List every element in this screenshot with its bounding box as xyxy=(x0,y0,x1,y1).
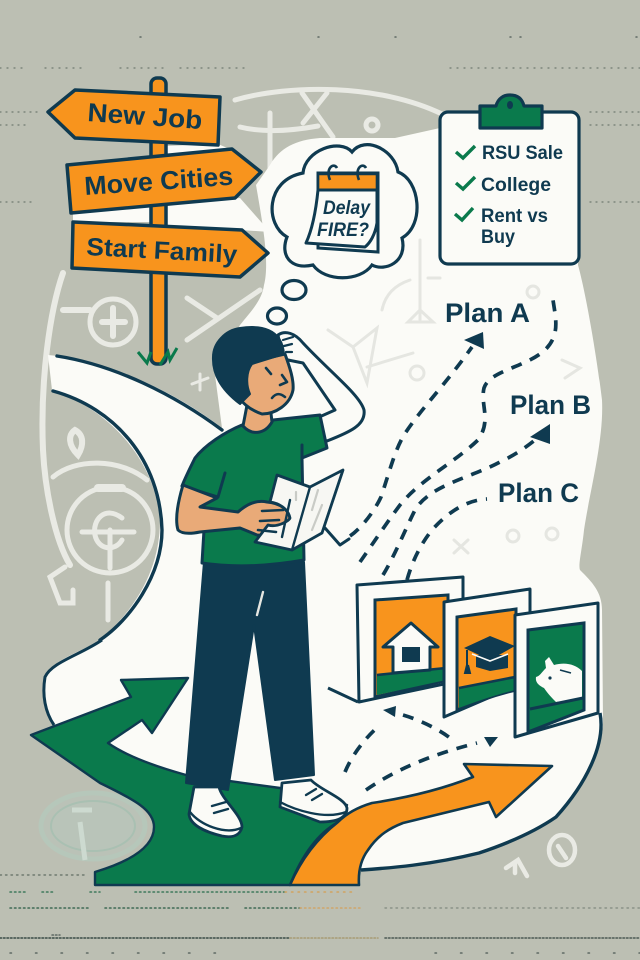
house icon xyxy=(383,623,438,673)
panel: piggy bank xyxy=(515,603,598,737)
thought bubble xyxy=(268,145,417,324)
green arrow road xyxy=(31,678,347,885)
panel: graduation xyxy=(444,589,530,717)
calendar: Delay xyxy=(323,198,371,219)
checklist text: RSU Sale xyxy=(482,142,563,164)
faint sketches on white xyxy=(328,240,580,553)
calendar xyxy=(306,166,378,252)
sign: Move Cities: Move Cities xyxy=(83,161,234,201)
clipboard checklist: Rent vs xyxy=(481,205,548,227)
white background blob xyxy=(44,120,603,880)
right shoe xyxy=(280,780,347,822)
hair xyxy=(213,327,284,404)
clipboard checklist xyxy=(440,95,579,264)
piggy icon xyxy=(536,657,582,702)
road: white left edge xyxy=(44,640,102,725)
face xyxy=(231,354,293,414)
arrowheads xyxy=(383,332,550,747)
grass xyxy=(138,348,177,365)
road: right white edge xyxy=(361,713,601,870)
faint compass stamp xyxy=(41,793,145,860)
sign: Start Family: Start Family xyxy=(86,233,238,269)
dashed plan paths xyxy=(345,300,556,790)
thought dots xyxy=(282,280,306,300)
sign: New Job xyxy=(48,90,220,145)
neck xyxy=(243,400,272,432)
infographic illustration: Plan B xyxy=(510,390,591,420)
sign: Start Family xyxy=(72,222,268,277)
signpost xyxy=(48,78,268,365)
lower arm xyxy=(177,485,290,537)
clipboard checklist: Buy xyxy=(481,226,515,248)
shirt xyxy=(182,415,327,566)
sign: Move Cities xyxy=(67,149,261,213)
plan labels: Plan A xyxy=(445,298,530,328)
cap icon xyxy=(476,655,508,671)
infographic illustration: Plan C xyxy=(498,478,579,508)
open book xyxy=(255,470,343,550)
person xyxy=(177,327,364,837)
left shoe xyxy=(189,787,242,837)
clipboard checklist: College xyxy=(481,174,551,196)
chalk smiley and star xyxy=(506,835,575,876)
book tail xyxy=(325,528,349,545)
post xyxy=(151,78,166,364)
road curves xyxy=(53,356,222,640)
orange arrow road xyxy=(290,764,552,885)
legs xyxy=(186,562,314,790)
sign: New Job: New Job xyxy=(87,97,203,135)
calendar: FIRE? xyxy=(317,220,369,241)
panel: house xyxy=(328,577,463,702)
chalk sketches on background xyxy=(42,89,442,620)
white gaps between signs xyxy=(73,144,270,232)
clip xyxy=(480,95,542,128)
fingers xyxy=(258,510,283,532)
raised arm xyxy=(278,333,364,441)
checks xyxy=(455,146,475,220)
